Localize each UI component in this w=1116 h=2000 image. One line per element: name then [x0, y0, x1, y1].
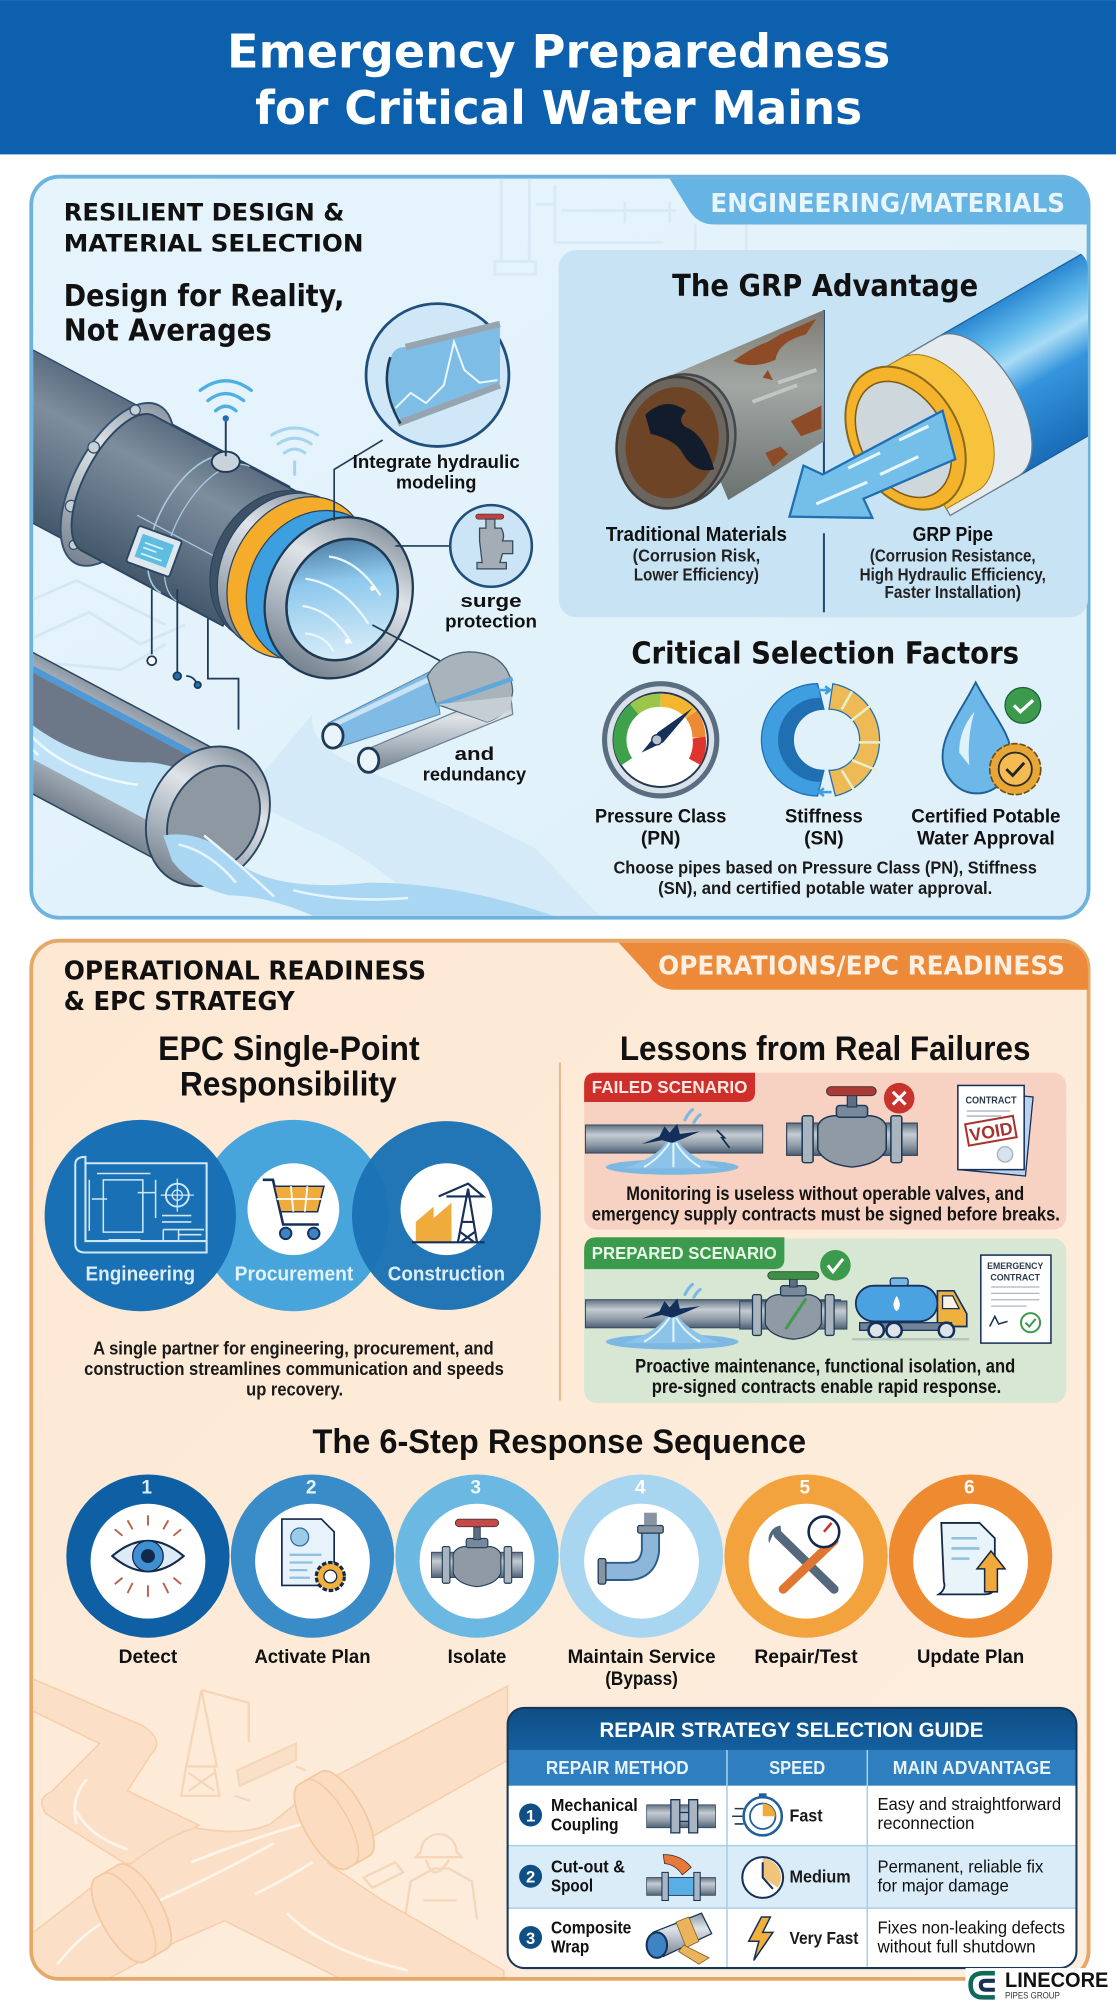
step 2: activate plan: [231, 1474, 394, 1668]
label: Activate Plan: [254, 1646, 371, 1668]
label: certified potable water approval: [911, 806, 1061, 849]
icon: stiffness ring: [761, 684, 880, 796]
row: mechanical coupling: Fast: [789, 1805, 823, 1825]
title: [227, 25, 890, 135]
tag: PREPARED SCENARIO: [592, 1243, 777, 1263]
section: critical selection factors: [595, 636, 1061, 898]
label: certified potable water approval: Water Approval: [917, 827, 1055, 849]
icon: wireless signal: [200, 381, 251, 455]
row: mechanical coupling: [519, 1793, 1061, 1835]
table outline: [508, 1708, 1076, 1968]
text: Proactive maintenance, functional isolation, and: [635, 1356, 1015, 1377]
heading: Critical Selection Factors: [631, 636, 1019, 671]
illustration: corroded traditional pipe: [603, 310, 824, 520]
section heading: RESILIENT DESIGN &: [64, 199, 344, 227]
label: (Bypass): [605, 1668, 678, 1690]
arrow: flow: [789, 411, 955, 518]
row: composite wrap: Composite: [551, 1918, 631, 1938]
text: GRP pipe: GRP Pipe: [913, 524, 993, 546]
logo: Linecore Pipes Group: [965, 1968, 1116, 2000]
title: Emergency Preparedness: [227, 25, 890, 79]
watermark: pipes and construction illustration: [32, 1679, 508, 1980]
illustration: GRP pipe with flow arrow: [844, 254, 1088, 516]
panel: operational readiness and EPC strategy: [31, 941, 1089, 1980]
text: pre-signed contracts enable rapid response.: [652, 1377, 1001, 1398]
text: GRP pipe: Faster Installation): [885, 582, 1021, 602]
step 5: repair/test: 5: [799, 1478, 810, 1499]
heading: The 6-Step Response Sequence: [312, 1423, 806, 1461]
icon: void contract: VOID: [968, 1118, 1014, 1145]
subheading: EPC single-point responsibility: EPC Single-Point: [158, 1030, 420, 1068]
row: cut-out and spool: Spool: [551, 1876, 593, 1896]
icon: working valve: [740, 1250, 851, 1339]
diagram: EPC circles: [45, 1120, 541, 1311]
column headers: MAIN ADVANTAGE: [893, 1757, 1051, 1778]
section heading: MATERIAL SELECTION: [64, 229, 363, 257]
row: composite wrap: without full shutdown: [877, 1937, 1036, 1957]
row: mechanical coupling: Mechanical: [551, 1795, 638, 1815]
icon: signed emergency contract: EMERGENCY: [987, 1261, 1044, 1272]
row: cut-out and spool: [519, 1855, 1044, 1900]
title: for Critical Water Mains: [255, 81, 862, 135]
table grid: [508, 1750, 1076, 1968]
divider: [559, 1062, 561, 1400]
circle: engineering: [45, 1120, 236, 1311]
panel: resilient design and material selection: [0, 177, 1116, 918]
step 1: detect: [66, 1474, 230, 1668]
label: Repair/Test: [754, 1646, 858, 1668]
tab: operations/EPC readiness: OPERATIONS/EPC READINESS: [658, 951, 1065, 981]
row: composite wrap: Very Fast: [789, 1928, 858, 1948]
caption: [84, 1338, 504, 1399]
callout: redundancy: [323, 625, 527, 785]
faint background pipework: [495, 179, 746, 274]
circle: procurement: [198, 1120, 389, 1311]
icon: signed emergency contract: CONTRACT: [990, 1273, 1040, 1284]
faint ground lines: [33, 580, 185, 670]
section heading: [64, 957, 426, 1017]
subheading: design for reality: [64, 279, 344, 349]
title bar: [508, 1708, 1076, 1750]
label: pressure class: (PN): [641, 827, 680, 849]
tag: [584, 1073, 755, 1102]
card: prepared scenario: [584, 1237, 1066, 1403]
tab: engineering/materials: [670, 179, 1088, 225]
label: redundancy: [423, 764, 527, 785]
label: Detect: [119, 1646, 178, 1668]
label: stiffness: [785, 806, 863, 849]
subheading: EPC single-point responsibility: Responsibility: [180, 1066, 397, 1104]
label: [353, 451, 520, 493]
section heading: & EPC STRATEGY: [64, 987, 295, 1017]
label: [445, 590, 537, 632]
label: Isolate: [448, 1646, 506, 1668]
icon: void contract: [958, 1085, 1033, 1176]
caption: construction streamlines communication and speeds: [84, 1358, 504, 1379]
label: Update Plan: [917, 1646, 1024, 1668]
card: failed scenario: [584, 1073, 1066, 1230]
row: composite wrap: Fixes non-leaking defects: [877, 1918, 1065, 1938]
subheading: design for reality: Not Averages: [64, 314, 272, 349]
caption: Choose pipes based on Pressure Class (PN), Stiffness: [613, 858, 1037, 878]
sensor wires: [147, 589, 239, 730]
row: composite wrap: 3: [526, 1929, 535, 1948]
label: Integrate hydraulic: [353, 451, 520, 472]
text: [592, 1184, 1060, 1226]
label: and: [455, 743, 494, 764]
text: traditional materials: Traditional Materials: [606, 524, 787, 546]
text: traditional materials: (Corrusion Risk,: [633, 545, 760, 565]
circle: procurement: Procurement: [235, 1264, 353, 1286]
subheading: design for reality: Design for Reality,: [64, 279, 344, 314]
text: GRP pipe: High Hydraulic Efficiency,: [860, 564, 1046, 584]
divider: [823, 310, 825, 612]
icon: signed emergency contract: [981, 1255, 1051, 1343]
icon: faint wireless signal: [272, 428, 318, 475]
label: pressure class: [595, 806, 726, 849]
text: GRP pipe: [860, 524, 1046, 602]
callout: surge protection: [395, 505, 537, 632]
section heading: OPERATIONAL READINESS: [64, 957, 426, 987]
step 4: maintain service: [560, 1474, 723, 1690]
icon: water tanker truck: [852, 1278, 969, 1339]
label: stiffness: Stiffness: [785, 806, 863, 828]
step 1: detect: 1: [141, 1478, 152, 1499]
icon: seized valve: [787, 1083, 917, 1167]
label: protection: [445, 611, 537, 632]
tag: [584, 1237, 784, 1269]
row: cut-out and spool: Medium: [789, 1867, 851, 1887]
section: lessons from real failures: [584, 1030, 1066, 1403]
row: mechanical coupling: reconnection: [877, 1813, 974, 1833]
step 6: update plan: 6: [964, 1478, 975, 1499]
label: certified potable water approval: Certified Potable: [911, 806, 1061, 828]
icon: burst pipe: [585, 1284, 841, 1349]
header banner: [0, 0, 1116, 154]
step 6: update plan: [889, 1474, 1052, 1668]
column headers: SPEED: [769, 1757, 825, 1778]
text: GRP pipe: (Corrusion Resistance,: [870, 545, 1036, 565]
row: mechanical coupling: Coupling: [551, 1814, 619, 1834]
title bar: REPAIR STRATEGY SELECTION GUIDE: [599, 1717, 983, 1742]
tab: engineering/materials: ENGINEERING/MATERIALS: [710, 189, 1065, 219]
light water stream background: [242, 714, 599, 916]
row: cut-out and spool: Cut-out &: [551, 1856, 625, 1876]
row: cut-out and spool: for major damage: [877, 1876, 1009, 1896]
circle: construction: Construction: [388, 1264, 505, 1286]
circle: engineering: Engineering: [85, 1264, 195, 1286]
section: 6-step response sequence: [66, 1423, 1052, 1690]
step 4: maintain service: 4: [635, 1478, 646, 1499]
table: repair strategy selection guide: [508, 1708, 1076, 1968]
text: Monitoring is useless without operable valves, and: [626, 1184, 1024, 1205]
label: modeling: [396, 472, 476, 493]
icon: potable water drop with certification: [943, 682, 1041, 795]
label: stiffness: (SN): [804, 827, 844, 849]
label: pressure class: Pressure Class: [595, 806, 726, 828]
column headers: REPAIR METHOD: [546, 1757, 689, 1778]
step 5: repair/test: [724, 1474, 888, 1668]
step 2: activate plan: 2: [306, 1478, 317, 1499]
panel: the GRP advantage: [558, 250, 1088, 618]
text: traditional materials: Lower Efficiency): [634, 564, 759, 584]
row: composite wrap: Wrap: [551, 1937, 589, 1957]
label: [568, 1646, 716, 1690]
caption: [613, 858, 1037, 898]
heading: The GRP Advantage: [672, 269, 978, 304]
caption: A single partner for engineering, procurement, and: [93, 1338, 494, 1359]
caption: up recovery.: [246, 1378, 343, 1399]
illustration: main pipe with sensors: [33, 349, 414, 680]
label: Maintain Service: [568, 1646, 716, 1668]
row: composite wrap: [519, 1913, 1065, 1964]
icon: burst pipe: [585, 1110, 763, 1175]
sensor node: [212, 452, 240, 472]
heading: Lessons from Real Failures: [620, 1030, 1031, 1068]
subheading: EPC single-point responsibility: [158, 1030, 420, 1104]
tag: FAILED SCENARIO: [592, 1077, 747, 1097]
icon: void contract: CONTRACT: [965, 1095, 1017, 1106]
text: [635, 1356, 1015, 1398]
caption: (SN), and certified potable water approval.: [658, 878, 992, 898]
label: [423, 743, 527, 785]
icon: pressure gauge: [605, 684, 717, 796]
row: mechanical coupling: Easy and straightforward: [877, 1794, 1061, 1814]
circle: construction: [352, 1121, 541, 1310]
label: surge: [460, 590, 522, 611]
section heading: [64, 199, 363, 257]
sensor panel: [126, 526, 182, 577]
row: mechanical coupling: 1: [526, 1806, 535, 1825]
step 3: isolate: 3: [470, 1478, 481, 1499]
text: traditional materials: [606, 524, 787, 584]
logo: Linecore Pipes Group: LINECORE: [1005, 1969, 1108, 1992]
step 3: isolate: [395, 1474, 559, 1668]
row: cut-out and spool: Permanent, reliable fix: [877, 1856, 1044, 1876]
tab: operations/EPC readiness: [619, 943, 1088, 990]
row: cut-out and spool: 2: [526, 1868, 535, 1887]
illustration: lower pipe with water outflow: [33, 652, 554, 916]
callout: integrate hydraulic modeling: [334, 304, 520, 520]
column headers: [508, 1750, 1076, 1786]
